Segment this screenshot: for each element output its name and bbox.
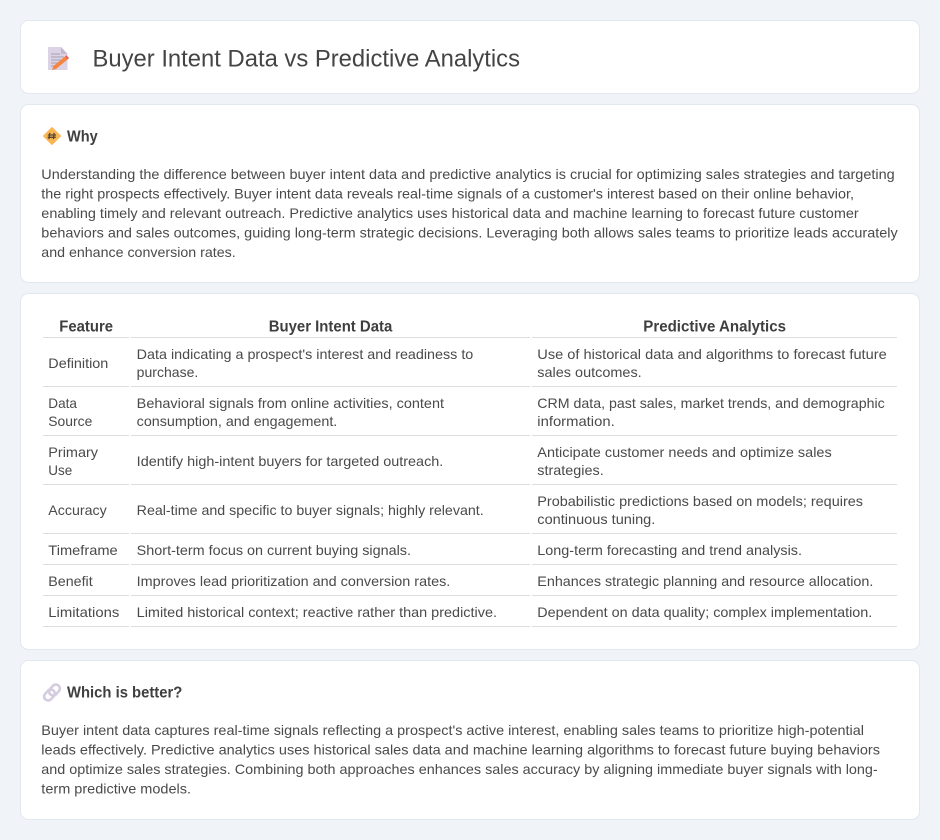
table row: timeframe: Timeframe [48, 542, 118, 558]
text block: which is better paragraph: term predictive models. [41, 781, 191, 797]
table header row: Buyer Intent Data [269, 319, 392, 336]
table row: benefit: Enhances strategic planning and resource allocation. [537, 573, 873, 589]
panel: why [20, 104, 920, 282]
table row: timeframe [48, 542, 802, 558]
table row: primary use [48, 444, 832, 478]
table row: definition: Use of historical data and algorithms to forecast future [537, 346, 887, 362]
text block: which is better paragraph: and optimize sales strategies. Combining both approaches enhances sales accuracy by aligning immediate buyer signals with long- [41, 761, 878, 777]
table row: definition: Data indicating a prospect's interest and readiness to [137, 346, 474, 362]
panel: title header [20, 20, 920, 94]
text block: why paragraph: and enhance conversion rates. [41, 244, 236, 260]
table row: definition [48, 346, 887, 380]
title: Buyer Intent Data vs Predictive Analytics [92, 46, 520, 73]
table row: limitations: Dependent on data quality; complex implementation. [537, 604, 872, 620]
table row: accuracy: Accuracy [48, 502, 107, 518]
panel: comparison table [20, 294, 920, 650]
text block: which is better paragraph [41, 722, 880, 797]
text block: why paragraph [41, 166, 898, 260]
table row: data source [48, 395, 885, 429]
table row: limitations [48, 604, 872, 620]
icon: memo with pencil [48, 47, 69, 70]
text block: why paragraph: Understanding the difference between buyer intent data and predictive analytics is crucial for optimizing sales strategies and targeting [41, 166, 895, 182]
heading: which is better: Which is better? [67, 685, 182, 702]
panel: which is better [20, 660, 920, 820]
heading: why: Why [67, 129, 98, 146]
table row: primary use: Anticipate customer needs and optimize sales [537, 444, 832, 460]
table header row: Predictive Analytics [643, 319, 786, 336]
icon: chain link [43, 683, 61, 702]
table row: definition: sales outcomes. [537, 364, 642, 380]
text block: why paragraph: enabling timely and relevant outreach. Predictive analytics uses historical data and machine learning to forecast future customer [41, 205, 859, 221]
table row: limitations: Limited historical context; reactive rather than predictive. [137, 604, 497, 620]
table row: data source: information. [537, 413, 615, 429]
text block: why paragraph: the right prospects effectively. Buyer intent data reveals real-time signals of a customer's interest based on their online behavior, [41, 185, 854, 201]
table row: data source: CRM data, past sales, market trends, and demographic [537, 395, 885, 411]
table row: accuracy: Probabilistic predictions based on models; requires [537, 493, 863, 509]
table row: data source: Behavioral signals from online activities, content [137, 395, 444, 411]
table row: accuracy [48, 493, 863, 527]
icon: warning diamond [44, 128, 60, 144]
text block: which is better paragraph: Buyer intent data captures real-time signals reflecting a prospect's active interest, enabling sales teams to prioritize high-potential [41, 722, 864, 738]
table row: benefit: Improves lead prioritization and conversion rates. [137, 573, 450, 589]
table row: primary use: strategies. [537, 462, 604, 478]
table header row [59, 319, 786, 336]
table row: primary use: Use [48, 462, 72, 478]
table header row: Feature [59, 319, 113, 336]
table row: accuracy: Real-time and specific to buyer signals; highly relevant. [137, 502, 484, 518]
table row: primary use: Identify high-intent buyers for targeted outreach. [137, 453, 443, 469]
table row: timeframe: Long-term forecasting and trend analysis. [537, 542, 802, 558]
table row: accuracy: continuous tuning. [537, 511, 655, 527]
table row: primary use: Primary [48, 444, 98, 460]
table row: definition: Definition [48, 355, 108, 371]
table row: definition: purchase. [137, 364, 198, 380]
table row: timeframe: Short-term focus on current buying signals. [137, 542, 411, 558]
table row: data source: Data [48, 395, 77, 411]
table row: benefit: Benefit [48, 573, 93, 589]
table row: benefit [48, 573, 873, 589]
text block: why paragraph: behaviors and sales outcomes, guiding long-term strategic decisions. Leveraging both allows sales teams to prioritize leads accurately [41, 224, 898, 240]
text block: which is better paragraph: leads effectively. Predictive analytics uses historical sales data and machine learning algorithms to forecast future buying behaviors [41, 742, 880, 758]
table row: data source: Source [48, 413, 93, 429]
table row: limitations: Limitations [48, 604, 119, 620]
table row: data source: consumption, and engagement. [137, 413, 337, 429]
